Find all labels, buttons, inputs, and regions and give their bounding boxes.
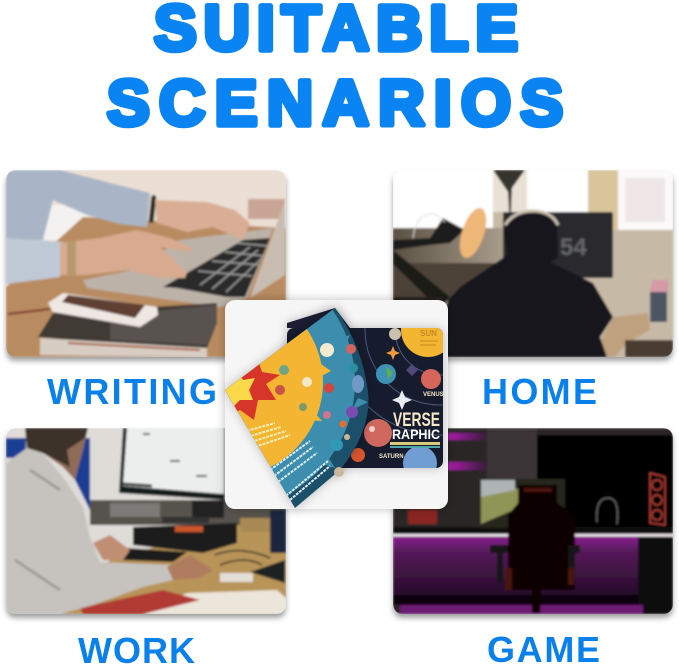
panel: home photo	[393, 170, 673, 357]
man shirt	[6, 448, 173, 614]
pen cup	[650, 292, 667, 322]
left hand	[60, 230, 192, 278]
headset outline	[597, 498, 618, 524]
yellow sun	[225, 372, 255, 408]
blue planet	[403, 446, 437, 480]
man head	[44, 430, 88, 480]
plant	[493, 170, 525, 212]
pin planet	[334, 467, 344, 477]
red starburst	[225, 360, 280, 420]
windows	[393, 170, 588, 228]
monitor number: 54	[560, 234, 587, 261]
product: space mouse pad front	[101, 255, 380, 515]
panel: writing photo	[6, 170, 286, 357]
product: space mouse pad back: SATURN	[379, 454, 404, 460]
panel: centre product card	[225, 300, 448, 509]
dark counter	[393, 228, 503, 263]
gaming monitor	[480, 479, 565, 528]
wooden desk	[60, 520, 286, 614]
keyboards	[110, 547, 187, 562]
title	[107, 0, 563, 139]
label: writing: WRITING	[47, 371, 217, 412]
product: space mouse pad back	[287, 225, 545, 480]
red PC case outline	[650, 473, 665, 525]
hands	[93, 535, 130, 560]
panel: game photo	[393, 428, 673, 614]
equipment clutter	[90, 500, 286, 525]
earth	[376, 364, 396, 384]
notebook	[38, 303, 217, 348]
product: space mouse pad back: VENUS	[423, 392, 444, 398]
spikes on yellow band	[305, 362, 331, 421]
chair red accents	[505, 488, 574, 590]
monitor	[503, 212, 613, 278]
sun	[401, 303, 455, 357]
text block on yellow	[243, 423, 290, 447]
card text: VERSE	[393, 410, 440, 431]
red folder	[80, 590, 200, 614]
person silhouette	[446, 214, 614, 357]
shirt sleeves	[6, 170, 150, 240]
desk edge	[393, 527, 673, 534]
orbit lines	[335, 225, 545, 435]
cables	[215, 551, 270, 565]
keyboard	[163, 238, 270, 297]
wall poster	[408, 510, 437, 524]
white star	[392, 390, 412, 410]
label: home: HOME	[482, 371, 597, 412]
text block on blue	[270, 441, 330, 500]
purple under-desk glow	[393, 537, 638, 595]
wooden desk	[6, 217, 286, 357]
spikes on blue band	[316, 335, 368, 468]
big planet	[364, 419, 392, 447]
phone	[48, 293, 158, 327]
lamp	[393, 218, 465, 250]
product: space mouse pad back: RAPHIC	[392, 426, 440, 442]
pegboard	[537, 435, 673, 533]
chair	[508, 485, 575, 613]
person arm	[600, 313, 650, 357]
right hand	[155, 200, 250, 240]
sun label: SUN	[420, 329, 437, 338]
purple diamond	[406, 364, 418, 376]
planets	[320, 343, 334, 357]
laptop base	[83, 228, 273, 307]
tower	[270, 510, 286, 553]
orange planets	[351, 448, 365, 462]
panel: work photo	[6, 428, 286, 614]
monitor	[119, 428, 225, 500]
purple shelf lights	[448, 433, 486, 440]
desktop computer	[133, 523, 237, 553]
laptop screen back	[250, 200, 285, 298]
orange star	[386, 346, 400, 360]
paper	[143, 590, 286, 614]
red planet	[421, 369, 441, 389]
heading line: scenarios: SCENARIOS	[107, 67, 563, 139]
moon	[389, 328, 401, 340]
